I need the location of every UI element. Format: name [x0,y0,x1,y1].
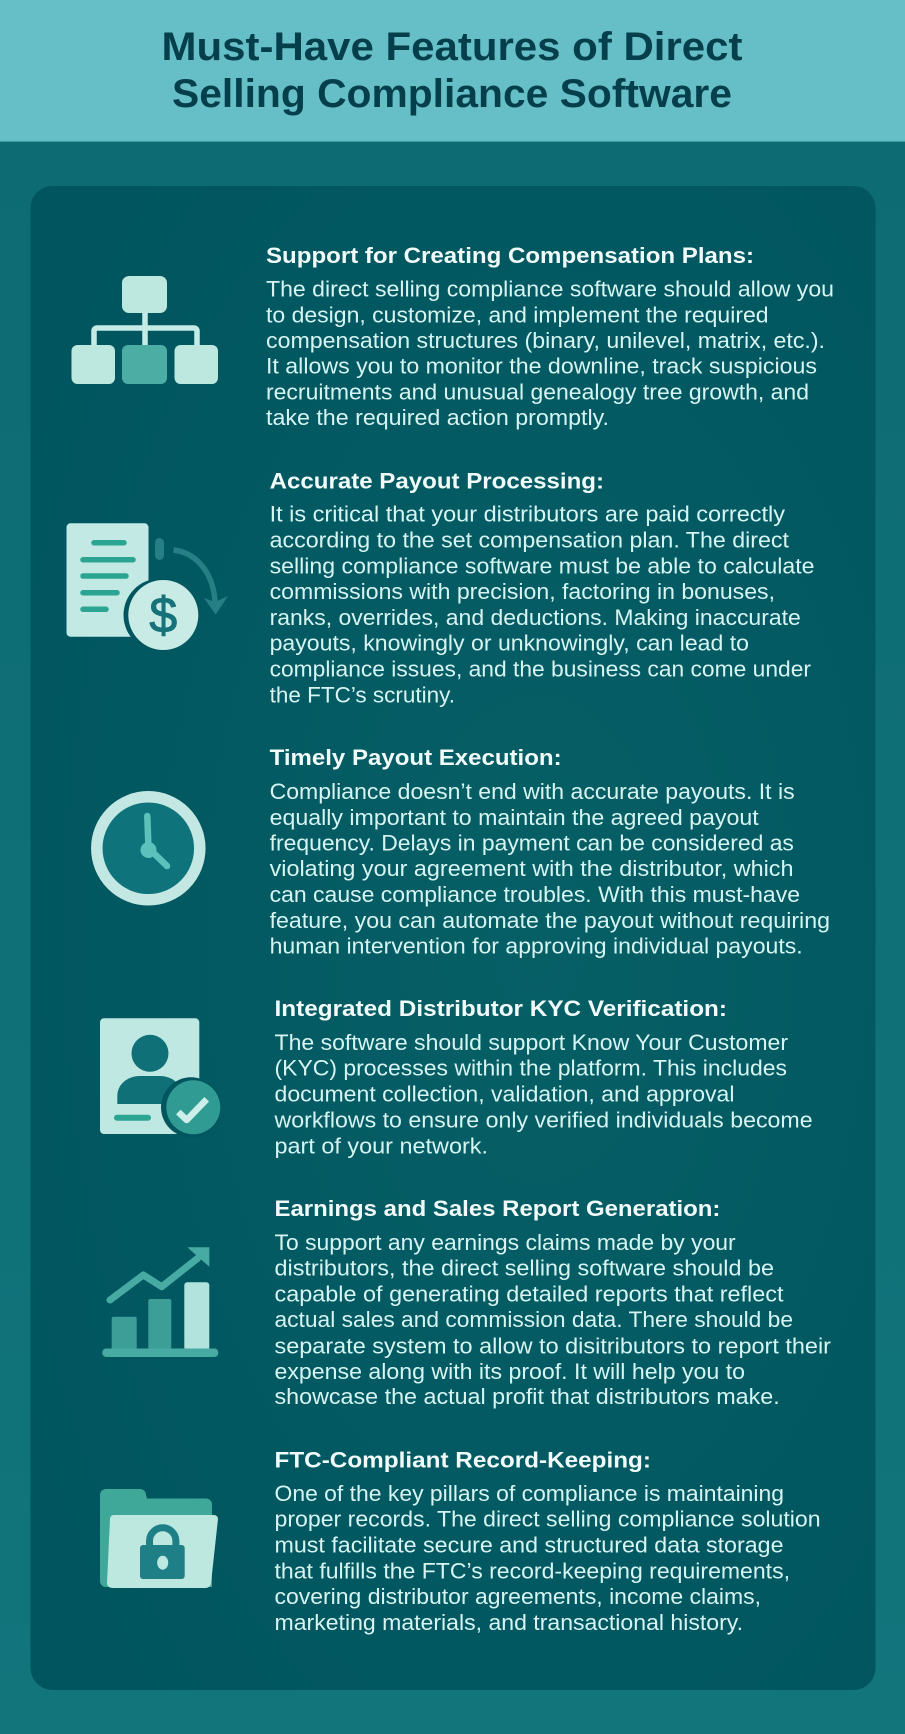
description: frequency. Delays in payment can be considered as [270,831,794,856]
icon: locked folder [100,1489,218,1588]
description: can cause compliance troubles. With this must-have [270,882,800,907]
description [270,779,830,958]
title: Must-Have Features of Direct [162,25,742,69]
description: showcase the actual profit that distributors make. [274,1384,780,1409]
icon: invoice with dollar coin [66,523,228,652]
icon: invoice with dollar coin: $ [149,587,177,643]
description: It allows you to monitor the downline, track suspicious [266,354,817,378]
description [266,277,834,430]
heading: Timely Payout Execution: [270,745,562,770]
heading: Accurate Payout Processing: [270,468,604,493]
description: the FTC’s scrutiny. [270,682,455,707]
description: proper records. The direct selling compliance solution [274,1507,821,1532]
feature: earnings reports [102,1196,831,1409]
description: The software should support Know Your Customer [274,1030,788,1055]
description: human intervention for approving individual payouts. [270,933,803,958]
feature: timely payout [97,745,830,958]
description: separate system to allow to disitributors to report their [274,1333,831,1358]
description: ranks, overrides, and deductions. Making inaccurate [270,605,801,630]
description: marketing materials, and transactional history. [274,1610,743,1635]
description: violating your agreement with the distributor, which [270,856,794,881]
description: distributors, the direct selling software should be [274,1256,774,1281]
title: Selling Compliance Software [172,72,732,116]
description: capable of generating detailed reports that reflect [274,1282,784,1307]
description: expense along with its proof. It will help you to [274,1359,745,1384]
description: Compliance doesn’t end with accurate payouts. It is [270,779,795,804]
description: actual sales and commission data. There should be [274,1307,793,1332]
description: equally important to maintain the agreed payout [270,805,759,830]
feature: accurate payout [66,468,814,707]
description: document collection, validation, and approval [274,1082,734,1107]
icon: rising bar chart [102,1247,218,1357]
header band with title [0,0,905,142]
description: The direct selling compliance software should allow you [266,277,834,302]
feature: record keeping [100,1447,821,1635]
heading: Integrated Distributor KYC Verification: [274,996,727,1021]
description: to design, customize, and implement the required [266,302,769,327]
description [274,1481,821,1635]
heading: FTC-Compliant Record-Keeping: [274,1447,651,1472]
description [273,1030,813,1158]
description: commissions with precision, factoring in bonuses, [270,579,775,604]
description: (KYC) processes within the platform. This includes [274,1056,787,1081]
icon: organisation hierarchy [72,276,218,384]
description: feature, you can automate the payout without requiring [270,908,830,933]
icon: clock [97,797,200,900]
description: covering distributor agreements, income claims, [274,1584,761,1609]
description: recruitments and unusual genealogy tree growth, and [266,380,809,404]
description: compliance issues, and the business can come under [270,657,811,682]
description: according to the set compensation plan. The direct [270,527,789,552]
description: compensation structures (binary, unilevel, matrix, etc.). [266,328,825,353]
description: payouts, knowingly or unknowingly, can lead to [270,631,749,656]
icon: ID card with check badge [100,1018,221,1137]
title [162,25,742,116]
description: It is critical that your distributors are paid correctly [270,502,785,527]
description: must facilitate secure and structured data storage [274,1533,784,1558]
feature: compensation plans [72,243,834,430]
heading: Support for Creating Compensation Plans: [266,243,754,268]
description: One of the key pillars of compliance is maintaining [274,1481,784,1506]
description [270,502,815,707]
description: selling compliance software must be able to calculate [270,553,815,578]
description: that fulfills the FTC’s record-keeping requirements, [274,1558,790,1583]
description: take the required action promptly. [266,405,609,430]
description [274,1230,831,1409]
description: To support any earnings claims made by your [274,1230,736,1255]
heading: Earnings and Sales Report Generation: [274,1196,720,1221]
feature: KYC verification [100,996,813,1158]
description: workflows to ensure only verified individuals become [273,1107,813,1132]
description: part of your network. [274,1133,488,1158]
